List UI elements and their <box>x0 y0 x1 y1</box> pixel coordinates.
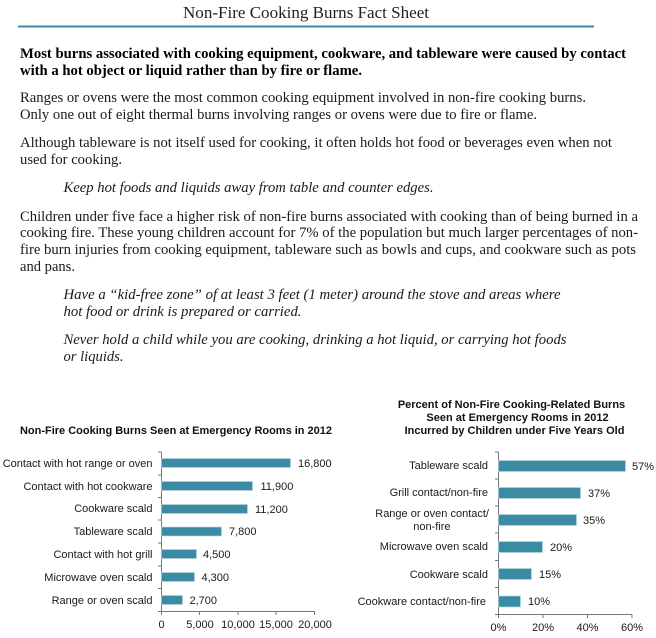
value labels <box>528 461 654 608</box>
text block: bold lead <box>20 46 626 79</box>
value labels: 10% <box>528 596 550 608</box>
text block: children under five: and pans. <box>20 259 75 275</box>
category labels: Contact with hot cookware <box>23 481 152 493</box>
x axis labels: 5,000 <box>186 619 214 631</box>
bar chart: percent under five <box>358 399 654 634</box>
text block: tableware: used for cooking. <box>20 152 122 168</box>
chart title: percent under five <box>398 399 625 437</box>
bars <box>498 460 626 607</box>
bars <box>162 458 290 604</box>
x axis labels: 40% <box>576 622 599 634</box>
text block: ranges or ovens: Ranges or ovens were the most common cooking equipment involved in non-fire cooking burns. <box>20 90 586 106</box>
value labels: 20% <box>550 542 572 554</box>
x axis labels <box>158 619 332 631</box>
value labels: 57% <box>632 461 654 473</box>
tip: keep hot foods away: Keep hot foods and liquids away from table and counter edges. <box>62 180 434 196</box>
value labels: 11,200 <box>255 504 288 516</box>
category labels: Contact with hot grill <box>53 549 152 561</box>
x axis labels: 15,000 <box>259 619 293 631</box>
category labels: Cookware scald <box>74 503 152 515</box>
chart title: non-fire cooking burns: Non-Fire Cooking Burns Seen at Emergency Rooms in 2012 <box>20 425 332 437</box>
tip: never hold a child: Never hold a child while you are cooking, drinking a hot liquid, or carrying hot foods <box>62 332 567 348</box>
category labels: Microwave oven scald <box>44 572 152 584</box>
value labels: 35% <box>583 515 605 527</box>
category labels: Tableware scald <box>74 526 152 538</box>
category labels: Cookware contact/non-fire <box>358 596 486 608</box>
tip: never hold a child <box>62 332 567 365</box>
x axis labels: 60% <box>621 622 643 634</box>
text block: ranges or ovens <box>20 90 586 123</box>
text block: bold lead: with a hot object or liquid rather than by fire or flame. <box>20 63 362 79</box>
value labels: 15% <box>539 569 561 581</box>
x axis labels: 0% <box>491 622 507 634</box>
value labels <box>190 458 332 607</box>
value labels: 4,300 <box>202 572 229 584</box>
category labels: non-fire <box>413 521 450 533</box>
value labels: 4,500 <box>203 549 231 561</box>
axes <box>158 452 314 615</box>
category labels <box>3 458 152 607</box>
category labels: Range or oven contact/ <box>375 508 490 520</box>
x axis labels: 0 <box>158 619 165 631</box>
text block: tableware: Although tableware is not itself used for cooking, it often holds hot food or beverages even when not <box>20 135 612 151</box>
category labels <box>358 460 490 608</box>
value labels: 37% <box>588 488 610 500</box>
text block: bold lead: Most burns associated with cooking equipment, cookware, and tableware were caused by contact <box>20 46 626 62</box>
category labels: Cookware scald <box>410 569 488 581</box>
chart title: percent under five: Seen at Emergency Rooms in 2012 <box>426 412 609 424</box>
text block: tableware <box>20 135 612 168</box>
axes <box>495 452 632 618</box>
tip: never hold a child: or liquids. <box>64 349 124 365</box>
text block: children under five: Children under five face a higher risk of non-fire burns associated with cooking than of being burned in a <box>20 209 639 225</box>
chart title: percent under five: Percent of Non-Fire Cooking-Related Burns <box>398 399 625 411</box>
text block: children under five <box>20 209 639 275</box>
value labels: 11,900 <box>260 481 293 493</box>
category labels: Range or oven scald <box>52 595 152 607</box>
bar chart: non-fire cooking burns <box>3 425 332 631</box>
category labels: Microwave oven scald <box>380 541 488 553</box>
category labels: Grill contact/non-fire <box>390 487 488 499</box>
text block: children under five: cooking fire. These young children account for 7% of the population but much larger percentages of non- <box>20 225 638 241</box>
value labels: 7,800 <box>229 526 257 538</box>
tip: kid-free zone: Have a “kid-free zone” of at least 3 feet (1 meter) around the stove and areas where <box>62 287 561 303</box>
title rule <box>18 26 594 28</box>
x axis labels: 20,000 <box>298 619 332 631</box>
x axis labels: 20% <box>532 622 554 634</box>
tip: kid-free zone: hot food or drink is prepared or carried. <box>64 304 302 320</box>
category labels: Contact with hot range or oven <box>3 458 152 470</box>
text block: ranges or ovens: Only one out of eight thermal burns involving ranges or ovens were due to fire or flame. <box>20 107 537 123</box>
x axis labels <box>491 622 643 634</box>
category labels: Tableware scald <box>409 460 488 472</box>
tip: kid-free zone <box>62 287 561 320</box>
text block: children under five: fire burn injuries from cooking equipment, tableware such as bowls and cups, and cookware such as pots <box>20 242 636 258</box>
value labels: 16,800 <box>298 458 332 470</box>
chart title: percent under five: Incurred by Children under Five Years Old <box>405 425 624 437</box>
x axis labels: 10,000 <box>221 619 255 631</box>
title: Non-Fire Cooking Burns Fact Sheet <box>183 3 429 22</box>
value labels: 2,700 <box>190 595 217 607</box>
